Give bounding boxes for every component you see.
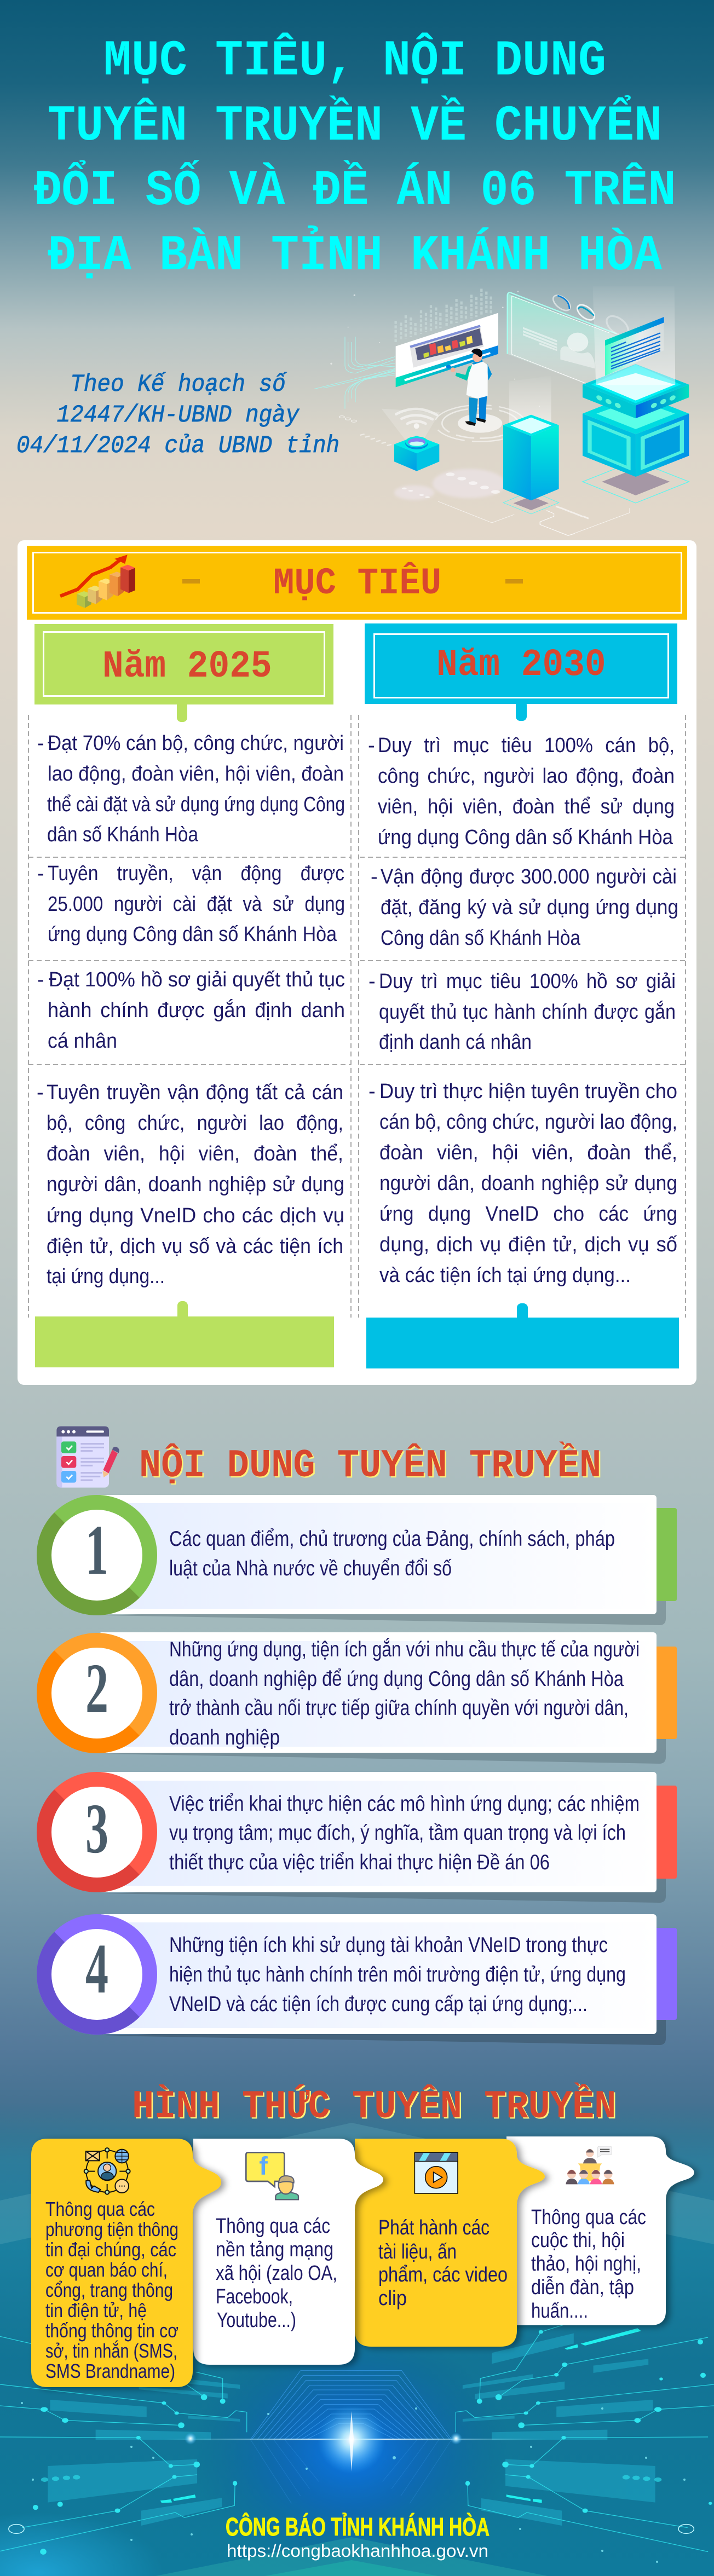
- text: card 1: sở, tin nhắn (SMS,: [45, 2340, 177, 2362]
- banner: objectives heading: [27, 546, 687, 620]
- text: 2030 objective 4: -: [368, 1080, 376, 1103]
- text: card 3: phẩm, các video: [378, 2263, 508, 2286]
- text: 2030 objective 1: -: [368, 734, 375, 757]
- text: card 1: SMS Brandname): [45, 2360, 175, 2382]
- item 4: 4: [85, 1930, 108, 2008]
- text: 2025 objective 3: [37, 968, 345, 1053]
- item 3: 3: [85, 1789, 108, 1868]
- text: 2025 objective 1: lao động, đoàn viên, hội viên, đoàn: [48, 763, 344, 785]
- text: card 1: tin điện tử, hệ: [45, 2299, 147, 2321]
- header: year 2025: Năm 2025: [102, 645, 272, 689]
- text: card 3: tài liệu, ấn: [378, 2240, 457, 2263]
- text: 2030 objective 1: ứng dụng Công dân số Khánh Hòa: [378, 826, 673, 849]
- text: card 4: [531, 2206, 646, 2323]
- text: 2025 objective 4: người dân, doanh nghiệp sử dụng: [47, 1173, 344, 1196]
- text: 2030 objective 2: Vận động được 300.000 người cài: [381, 865, 677, 888]
- icon: facebook user: [246, 2151, 298, 2199]
- text: 2025 objective 1: thể cài đặt và sử dụng ứng dụng Công: [47, 793, 345, 816]
- title: TUYÊN TRUYỀN VỀ CHUYỂN: [48, 95, 662, 155]
- text: 2030 objective 3: Duy trì mục tiêu 100% hồ sơ giải: [379, 970, 676, 993]
- text: 2030 objective 4: Duy trì thực hiện tuyên truyền cho: [379, 1080, 677, 1103]
- item 3: Việc triển khai thực hiện các mô hình ứng dụng; các nhiệm: [169, 1792, 640, 1816]
- text: 2030 objective 2: Công dân số Khánh Hòa: [381, 927, 581, 950]
- text: 2025 objective 3: Đạt 100% hồ sơ giải quyết thủ tục: [49, 968, 345, 991]
- item 2: dân, doanh nghiệp để ứng dụng Công dân số Khánh Hòa: [169, 1667, 624, 1691]
- text: 2030 objective 3: [368, 970, 676, 1054]
- text: 2025 objective 1: Đạt 70% cán bộ, công chức, người: [48, 732, 344, 755]
- footer: publisher name: CÔNG BÁO TỈNH KHÁNH HÒA: [226, 2513, 490, 2541]
- text: card 3: Phát hành các: [378, 2216, 490, 2239]
- text: 2025 objective 2: -: [37, 862, 44, 885]
- title: ĐỔI SỐ VÀ ĐỀ ÁN 06 TRÊN: [33, 159, 676, 220]
- item 1: luật của Nhà nước về chuyển đổi số: [169, 1557, 452, 1580]
- header: year 2030: [365, 623, 677, 721]
- text: 2030 objective 1: viên, hội viên, đoàn thể sử dụng: [378, 795, 675, 818]
- text: 2030 objective 2: đặt, đăng ký và sử dụng ứng dụng: [381, 896, 678, 919]
- text: card 2: Facebook,: [216, 2285, 293, 2308]
- text: 2030 objective 4: và các tiện ích tại ứng dụng...: [379, 1264, 631, 1287]
- text: card 4: diễn đàn, tập: [531, 2275, 634, 2299]
- text: 2030 objective 2: [371, 865, 678, 950]
- text: 2030 objective 1: công chức, người lao động, đoàn: [378, 765, 675, 788]
- text: 2030 objective 2: -: [371, 865, 378, 888]
- text: card 1: cơ quan báo chí,: [45, 2259, 168, 2281]
- text: 2025 objective 4: ứng dụng VneID cho các dịch vụ: [47, 1204, 344, 1227]
- text: card 2: xã hội (zalo OA,: [216, 2262, 337, 2285]
- text: card 1: [45, 2198, 178, 2382]
- item 3: thiết thực của việc triển khai thực hiện Đề án 06: [169, 1851, 550, 1874]
- header: year 2030: Năm 2030: [436, 644, 606, 687]
- text: card 2: nền tảng mạng: [216, 2238, 333, 2261]
- text: 2030 objective 4: ứng dụng VneID cho các ứng: [379, 1203, 677, 1226]
- banner: objectives heading: MỤC TIÊU: [273, 562, 441, 605]
- text: 2025 objective 3: cá nhân: [48, 1030, 117, 1053]
- icon: communication network: [84, 2148, 130, 2194]
- text: 2030 objective 4: đoàn viên, hội viên, đoàn thể,: [379, 1141, 677, 1164]
- text: 2030 objective 3: định danh cá nhân: [379, 1031, 532, 1054]
- text: 2025 objective 4: Tuyên truyền vận động tất cả cán: [47, 1081, 343, 1104]
- text: card 2: Thông qua các: [216, 2215, 330, 2238]
- text: card 1: Thông qua các: [45, 2198, 155, 2220]
- bottom technology background: [0, 2102, 714, 2576]
- title: MỤC TIÊU, NỘI DUNG: [103, 32, 606, 90]
- text: 2025 objective 3: -: [37, 968, 44, 991]
- text: 2025 objective 3: hành chính được gắn định danh: [48, 998, 345, 1022]
- item 2: 2: [85, 1649, 108, 1728]
- title: [33, 32, 676, 285]
- item 4: hiện thủ tục hành chính trên môi trường điện tử, ứng dụng: [169, 1963, 626, 1986]
- icon: facebook user: f: [259, 2151, 268, 2180]
- item 1: 1: [85, 1511, 108, 1590]
- text: 2030 objective 3: -: [368, 970, 376, 993]
- card 3: publications: [355, 2139, 545, 2347]
- item 3: [37, 1772, 677, 1903]
- text: card 4: huấn....: [531, 2300, 588, 2323]
- item 4: [37, 1914, 677, 2045]
- text: card 4: thảo, hội nghị,: [531, 2252, 641, 2275]
- subtitle: plan reference: 12447/KH-UBND ngày: [57, 401, 300, 429]
- icon: speaker and audience: [566, 2146, 614, 2184]
- text: card 2: Youtube...): [217, 2309, 296, 2332]
- text: 2030 objective 1: [368, 734, 675, 849]
- text: card 2: [216, 2215, 337, 2332]
- text: 2025 objective 4: bộ, công chức, người lao động,: [47, 1112, 343, 1135]
- text: 2030 objective 4: dụng, dịch vụ điện tử, dịch vụ số: [379, 1233, 677, 1256]
- icon: checklist with pencil: [56, 1426, 119, 1488]
- panel: objectives: [18, 540, 696, 1385]
- item 2: doanh nghiệp: [169, 1726, 280, 1749]
- icon: growth chart: [60, 555, 135, 608]
- text: 2025 objective 2: 25.000 người cài đặt và sử dụng: [48, 893, 345, 916]
- text: 2030 objective 4: cán bộ, công chức, người lao động,: [379, 1111, 677, 1134]
- text: 2025 objective 2: Tuyên truyền, vận động được: [48, 862, 344, 885]
- subtitle: plan reference: 04/11/2024 của UBND tỉnh: [16, 432, 339, 459]
- text: 2025 objective 1: -: [37, 732, 44, 755]
- text: 2025 objective 4: điện tử, dịch vụ số và các tiện ích: [47, 1235, 343, 1258]
- text: 2025 objective 2: ứng dụng Công dân số Khánh Hòa: [48, 923, 337, 946]
- text: 2030 objective 4: [368, 1080, 677, 1287]
- text: 2025 objective 1: [37, 732, 345, 846]
- text: card 1: thống thông tin cơ: [45, 2319, 178, 2342]
- heading: forms: HÌNH THỨC TUYÊN TRUYỀN: [132, 2082, 616, 2129]
- icon: video clip: [414, 2152, 458, 2193]
- text: card 4: cuộc thi, hội: [531, 2229, 625, 2252]
- text: card 1: phương tiện thông: [45, 2218, 178, 2240]
- item 4: VNeID và các tiện ích được cung cấp tại ứng dụng;...: [169, 1992, 588, 2016]
- subtitle: plan reference: Theo Kế hoạch số: [70, 371, 287, 398]
- footer block: 2025 column: [35, 1301, 334, 1367]
- text: 2030 objective 1: Duy trì mục tiêu 100% cán bộ,: [378, 734, 675, 757]
- text: 2030 objective 3: quyết thủ tục hành chính được gắn: [379, 1000, 676, 1024]
- item 3: vụ trọng tâm; mục đích, ý nghĩa, tầm quan trọng và lợi ích: [169, 1821, 626, 1845]
- card 4: events: [506, 2136, 694, 2325]
- text: card 1: cổng, trang thông: [45, 2279, 173, 2301]
- card 2: social networks: [193, 2139, 383, 2365]
- text: 2025 objective 4: [37, 1081, 344, 1288]
- subtitle: plan reference: [16, 371, 339, 459]
- text: card 4: Thông qua các: [531, 2206, 646, 2229]
- item 1: Các quan điểm, chủ trương của Đảng, chính sách, pháp: [169, 1527, 615, 1551]
- text: 2025 objective 4: tại ứng dụng...: [47, 1265, 165, 1288]
- text: 2030 objective 4: người dân, doanh nghiệp sử dụng: [379, 1172, 677, 1195]
- footer block: 2030 column: [366, 1303, 679, 1368]
- title: ĐỊA BÀN TỈNH KHÁNH HÒA: [48, 225, 663, 285]
- text: card 3: [378, 2216, 508, 2310]
- text: 2025 objective 1: dân số Khánh Hòa: [47, 823, 199, 846]
- illustration: digital technology scene: [314, 286, 689, 535]
- text: 2025 objective 4: đoàn viên, hội viên, đoàn thể,: [47, 1142, 343, 1165]
- item 1: [37, 1495, 677, 1625]
- text: card 3: clip: [378, 2287, 407, 2310]
- text: 2025 objective 2: [37, 862, 345, 946]
- card 1: mass media: [31, 2139, 221, 2387]
- item 2: [37, 1632, 677, 1764]
- footer: website: https://congbaokhanhhoa.gov.vn: [227, 2541, 488, 2561]
- item 4: Những tiện ích khi sử dụng tài khoản VNeID trong thực: [169, 1933, 608, 1957]
- heading: content: NỘI DUNG TUYÊN TRUYỀN: [139, 1441, 601, 1488]
- header: year 2025: [34, 624, 333, 722]
- text: 2025 objective 4: -: [37, 1081, 44, 1104]
- text: card 1: tin đại chúng, các: [45, 2238, 176, 2261]
